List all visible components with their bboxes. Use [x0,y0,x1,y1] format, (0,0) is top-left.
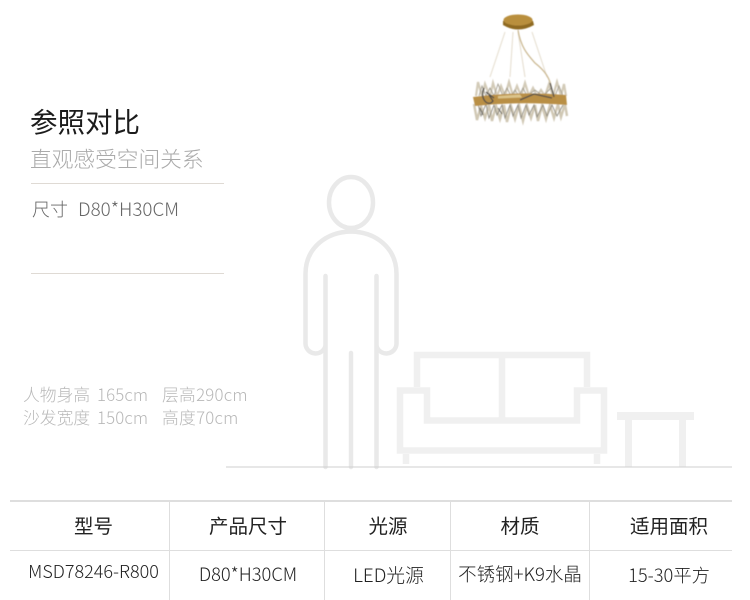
image: crystal chandelier [473,14,567,122]
title: 参照对比 [30,100,140,140]
reference measurements: 150cm [97,405,148,429]
divider [31,183,224,184]
specification table: 材质 [500,510,540,539]
reference measurements: 高度70cm [162,405,239,429]
specification table: 15-30平方 [628,562,710,588]
specification table: LED光源 [353,560,424,588]
dimension text [32,195,179,222]
specification table: D80*H30CM [199,561,297,587]
floor line [226,466,732,468]
reference measurements: 沙发宽度 [23,405,90,429]
specification table: 光源 [368,510,408,539]
icon: sofa [400,355,604,464]
icon: side table [617,412,694,467]
reference measurements: 人物身高 [23,382,90,406]
specification table: 适用面积 [630,510,708,539]
specification table: 产品尺寸 [209,510,287,539]
subtitle: 直观感受空间关系 [30,143,204,174]
dimension text: D80*H30CM [78,195,179,222]
reference measurements: 165cm [97,382,148,406]
specification table: 不锈钢+K9水晶 [458,560,582,586]
divider [31,273,224,274]
reference measurements: 层高290cm [162,382,248,406]
icon: person silhouette [306,177,396,467]
header cells: 型号 [74,510,113,539]
reference measurements [23,382,248,429]
dimension text: 尺寸 [32,196,68,222]
value cells: MSD78246-R800 [28,558,159,584]
